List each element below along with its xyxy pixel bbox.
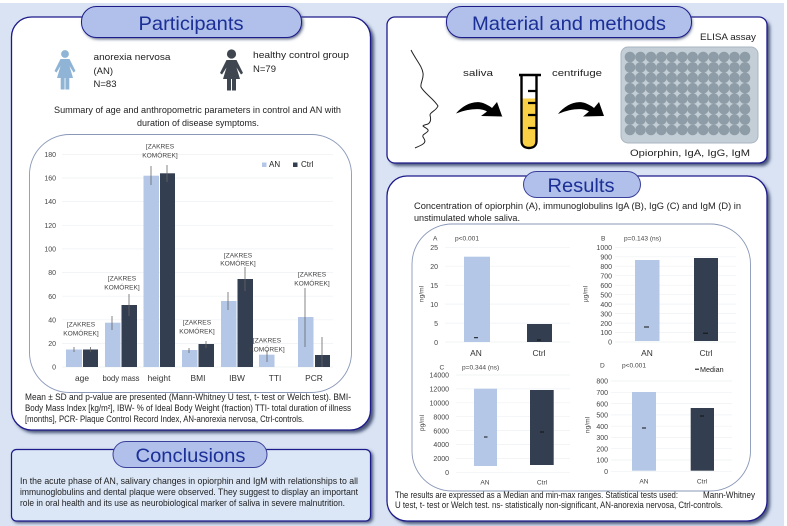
chart C: IgG: 6000 (433, 428, 449, 435)
bar chart: anthropometric parameters: KOMÓREK] (63, 328, 99, 338)
chart D: IgM: Ctrl (697, 478, 708, 486)
bar chart: anthropometric parameters: PCR (305, 373, 323, 383)
chart D: IgM (584, 362, 732, 486)
bar chart: anthropometric parameters: 20 (48, 341, 56, 348)
chart A: opiorphin: 10 (430, 302, 438, 309)
chart D: IgM: 800 (596, 379, 608, 386)
chart B: IgA: 0 (608, 340, 612, 346)
bar chart: anthropometric parameters: 80 (48, 270, 56, 277)
bar chart: anthropometric parameters: 120 (44, 223, 56, 230)
text: chart summary (54, 105, 341, 129)
icon: test tube (519, 75, 541, 148)
chart A: opiorphin: ng/ml (418, 285, 426, 302)
chart A: opiorphin: 5 (434, 321, 438, 328)
panel: material and methods (387, 6, 770, 166)
chart D: IgM: 200 (596, 446, 608, 453)
chart B: IgA (582, 236, 736, 358)
chart D: IgM: 700 (596, 390, 608, 397)
bar chart: anthropometric parameters: KOMÓREK] (104, 282, 140, 292)
heading: participants: Participants (138, 13, 244, 35)
bar chart: anthropometric parameters: [ZAKRES (146, 144, 175, 150)
panel: participants (12, 6, 374, 433)
heading: material and methods (446, 6, 692, 39)
chart C: IgG: 12000 (430, 387, 449, 394)
chart D: IgM: AN (639, 478, 649, 486)
text: results footnote (395, 490, 755, 510)
panel: conclusions (12, 442, 373, 523)
chart legend (262, 160, 314, 169)
bar chart: anthropometric parameters: [ZAKRES (183, 320, 212, 326)
bar chart: anthropometric parameters (30, 134, 352, 392)
text: control group (253, 50, 349, 75)
frame: results charts (412, 224, 750, 491)
chart B: IgA: 400 (600, 302, 612, 309)
icon: control person (220, 49, 243, 90)
chart B: IgA: 800 (600, 264, 612, 271)
chart B: IgA: 600 (600, 283, 612, 290)
chart A: opiorphin: A (433, 236, 438, 242)
chart B: IgA: 700 (600, 274, 612, 280)
text: chart footnote: Body Mass Index [kg/m²], IBW- % of Ideal Body Weight (fraction) TTI- total duration of illness (25, 403, 351, 413)
chart B: IgA: 500 (600, 292, 612, 300)
bar chart: anthropometric parameters: KOMÓREK] (179, 326, 215, 336)
chart B: IgA: µg/ml (582, 285, 590, 302)
chart D: IgM: 500 (596, 413, 608, 420)
text: results summary (414, 201, 741, 224)
text: centrifuge: centrifuge (552, 68, 602, 79)
text: conclusions body: immunoglobulins and dental plaque were observed. They suggest to display an important (20, 487, 358, 498)
chart A: opiorphin: p<0.001 (455, 236, 479, 242)
text: control group: N=79 (253, 64, 276, 75)
bar chart: anthropometric parameters: 140 (44, 199, 56, 206)
bar chart: anthropometric parameters: KOMÓREK] (142, 150, 178, 160)
chart C: IgG: AN (480, 480, 490, 486)
chart D: IgM: ng/ml (584, 416, 592, 433)
chart C: IgG: Ctrl (537, 480, 548, 486)
bar chart: anthropometric parameters: [ZAKRES (253, 338, 282, 344)
bar chart: anthropometric parameters: age (75, 373, 89, 383)
text: saliva: saliva (463, 68, 494, 79)
heading: results: Results (548, 175, 615, 197)
chart B: IgA: p=0.143 (ns) (624, 236, 661, 242)
chart A: opiorphin: 15 (430, 283, 438, 290)
chart B: IgA: 900 (600, 254, 612, 262)
chart B: IgA: B (601, 236, 606, 242)
bar chart: anthropometric parameters: 60 (48, 294, 56, 301)
chart legend: AN (269, 160, 280, 169)
text: chart footnote: [months], PCR- Plaque Control Record Index, AN-anorexia nervosa, Ctrl-controls. (25, 414, 304, 424)
bar chart: anthropometric parameters: 40 (48, 317, 56, 324)
chart A: opiorphin: AN (470, 348, 482, 358)
text: AN group: N=83 (94, 79, 116, 90)
bar chart: anthropometric parameters: height (148, 373, 171, 383)
chart C: IgG: 0 (445, 470, 449, 477)
text: results footnote: U test, t- test or Welch test. ns- statistically non-significant, AN-anorexia nervosa, Ctrl-controls. (395, 500, 723, 510)
bar chart: anthropometric parameters: KOMÓREK] (294, 278, 330, 288)
chart legend: Ctrl (301, 160, 314, 169)
text: AN group: anorexia nervosa (94, 52, 171, 63)
chart D: IgM: 0 (604, 469, 608, 476)
heading: participants (82, 6, 303, 39)
panel: results (387, 172, 770, 524)
chart D: IgM: 300 (596, 435, 608, 442)
icon: AN person (54, 50, 76, 90)
bar chart: anthropometric parameters: [ZAKRES (224, 252, 253, 260)
arrow: tube to plate (558, 102, 604, 116)
chart C: IgG: 2000 (433, 456, 449, 463)
chart B: IgA: AN (641, 348, 653, 358)
bar chart: anthropometric parameters: [ZAKRES (67, 322, 96, 328)
text: chart summary: Summary of age and anthropometric parameters in control and AN with (54, 105, 341, 116)
bar chart: anthropometric parameters: 0 (52, 365, 56, 372)
chart D: IgM: 400 (596, 424, 608, 431)
text: conclusions body: In the acute phase of AN, salivary changes in opiorphin and IgM with relationships to all (20, 476, 358, 487)
chart C: IgG: p=0.344 (ns) (462, 364, 499, 372)
chart B: IgA: 100 (600, 330, 612, 337)
chart C: IgG: 14000 (430, 373, 449, 380)
bar chart: anthropometric parameters: [ZAKRES (108, 276, 137, 282)
chart A: opiorphin (418, 236, 570, 358)
chart A: opiorphin: Ctrl (532, 348, 546, 358)
bar chart: anthropometric parameters: KOMÓREK] (220, 258, 256, 268)
text: results footnote: Mann-Whitney (703, 490, 755, 500)
text: conclusions body (20, 476, 358, 509)
bar chart: anthropometric parameters: BMI (191, 373, 205, 383)
icon: ELISA plate (621, 47, 758, 143)
text: analytes: Opiorphin, IgA, IgG, IgM (630, 148, 750, 159)
heading: conclusions (113, 442, 267, 468)
text: chart footnote (25, 392, 351, 424)
chart C: IgG: 8000 (433, 414, 449, 421)
text: chart footnote: Mean ± SD and p-value are presented (Mann-Whitney U test, t- test or Welch test). BMI- (25, 392, 351, 402)
chart D: IgM: 600 (596, 401, 608, 408)
chart D: IgM: D (600, 362, 605, 370)
bar chart: anthropometric parameters: TTI (269, 373, 281, 383)
chart C: IgG: C (440, 364, 444, 372)
text: conclusions body: role in oral health and its use as neurobiological marker of saliva in severe malnutrition. (20, 498, 345, 509)
bar chart: anthropometric parameters: body mass (102, 373, 140, 383)
chart B: IgA: 200 (600, 321, 612, 328)
arrow: saliva to tube (456, 102, 502, 116)
heading: results (524, 172, 640, 198)
text: control group: healthy control group (253, 50, 349, 61)
bar chart: anthropometric parameters: KOMÓREK] (249, 344, 285, 354)
heading: conclusions: Conclusions (136, 445, 246, 467)
heading: material and methods: Material and methods (472, 13, 666, 35)
chart A: opiorphin: 20 (430, 264, 438, 271)
chart C: IgG: 10000 (430, 400, 449, 408)
bar chart: anthropometric parameters: 100 (44, 246, 56, 254)
bar chart: anthropometric parameters: IBW (229, 373, 245, 383)
text: AN group: (AN) (94, 66, 113, 77)
chart B: IgA: Ctrl (699, 348, 713, 358)
text: results summary: Concentration of opiorphin (A), immunoglobulins IgA (B), IgG (C) and IgM (D) in (414, 201, 741, 212)
chart C: IgG (419, 364, 570, 486)
chart legend: median: Median (700, 365, 724, 374)
text: chart summary: duration of disease symptoms. (137, 118, 259, 129)
icon: face profile (411, 50, 438, 148)
text: results footnote: The results are expressed as a Median and min-max ranges. Statistical tests used: (395, 490, 678, 500)
chart A: opiorphin: 0 (434, 340, 438, 347)
text: results summary: unstimulated whole saliva. (414, 213, 520, 224)
chart C: IgG: 4000 (433, 442, 449, 449)
chart C: IgG: pg/ml (419, 414, 426, 431)
chart B: IgA: 300 (600, 312, 612, 318)
text: AN group (94, 52, 171, 90)
text: ELISA assay: ELISA assay (700, 32, 756, 43)
chart D: IgM: 100 (596, 458, 608, 465)
bar chart: anthropometric parameters: [ZAKRES (298, 272, 327, 278)
bar chart: anthropometric parameters: 180 (44, 152, 56, 159)
chart A: opiorphin: 25 (430, 245, 438, 252)
chart D: IgM: p<0.001 (622, 362, 646, 370)
bar chart: anthropometric parameters: 160 (44, 176, 56, 183)
chart B: IgA: 1000 (596, 245, 612, 252)
